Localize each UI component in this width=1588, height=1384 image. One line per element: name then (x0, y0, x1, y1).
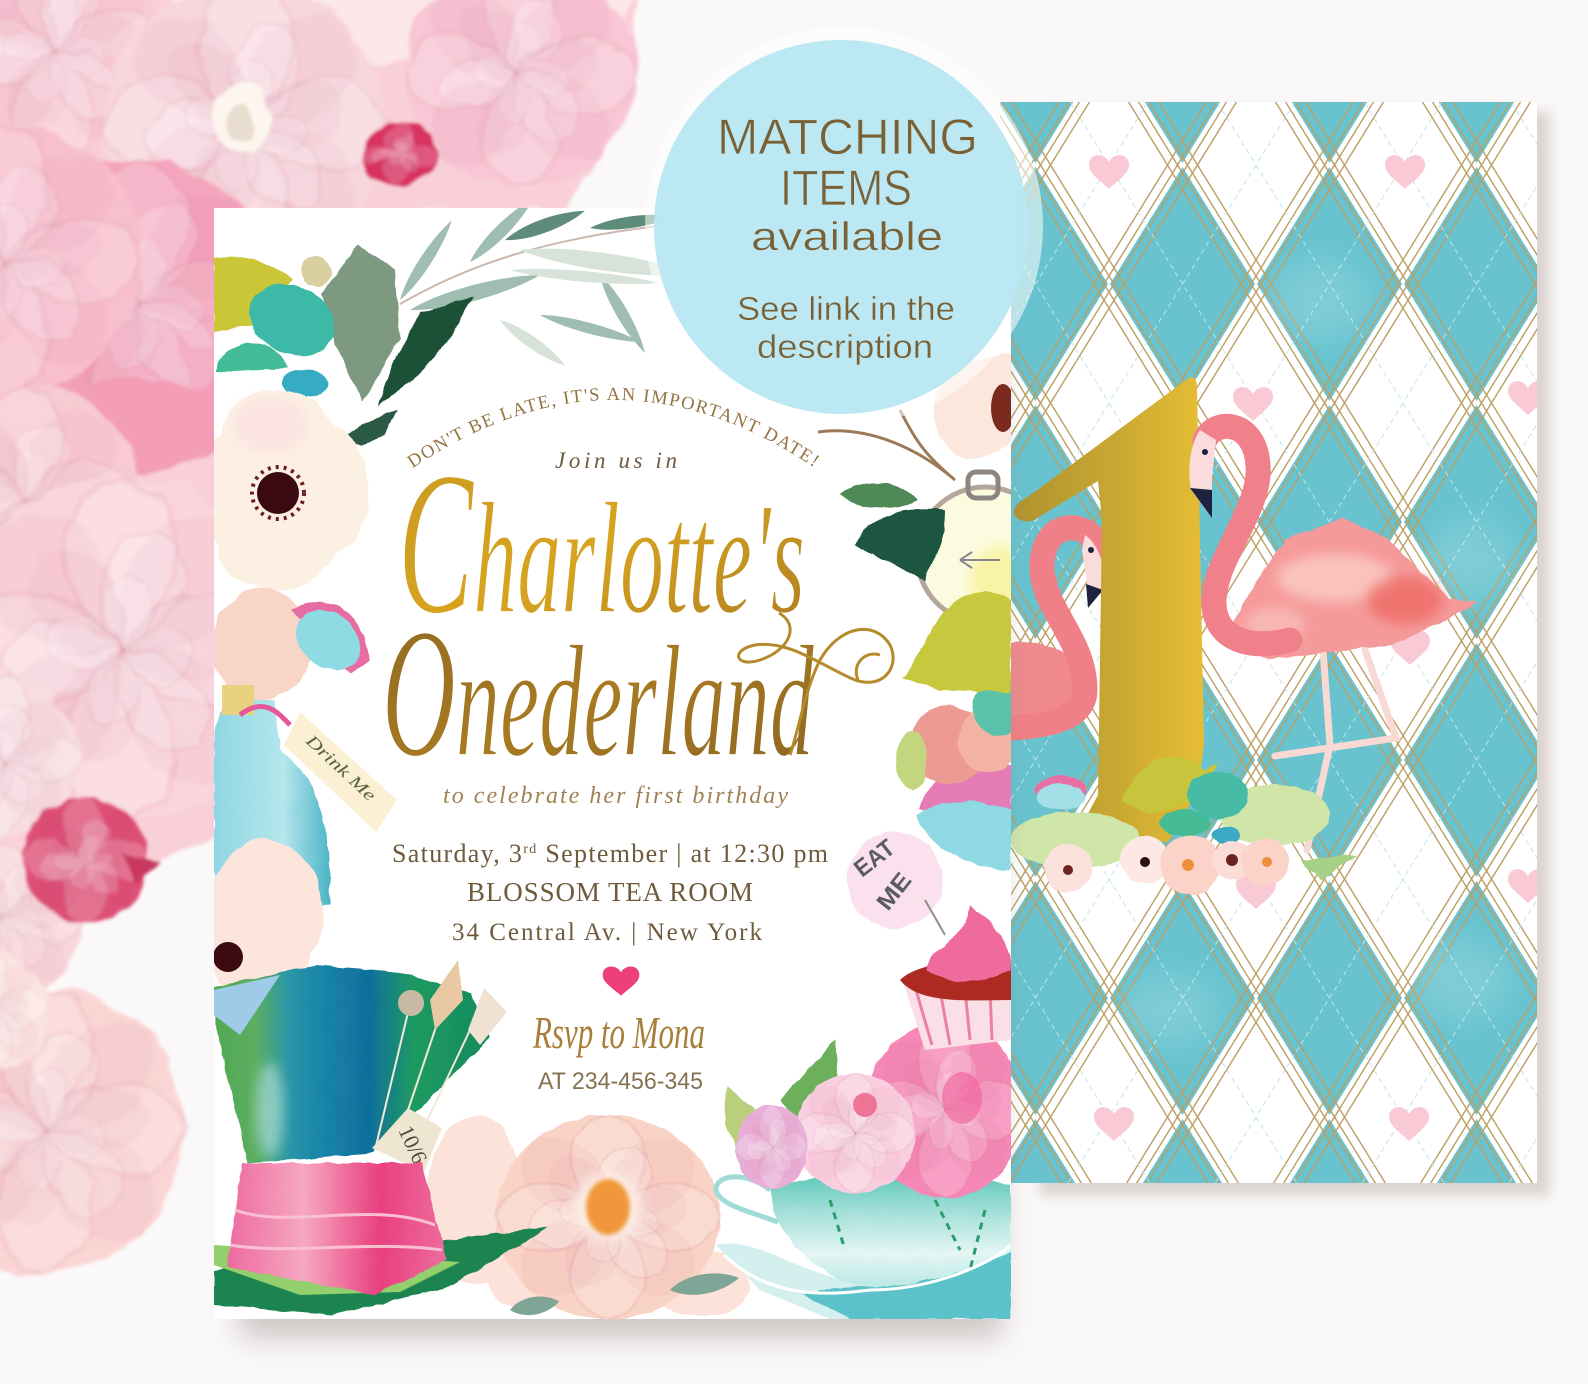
title: Charlotte's: Charlotte's (398, 430, 805, 657)
callout heading: MATCHING (717, 109, 978, 165)
callout available: available (751, 215, 943, 259)
striped patch (214, 975, 280, 1035)
title flourish (739, 613, 893, 755)
floral garland (1010, 757, 1358, 895)
callout heading line two: ITEMS (780, 160, 912, 216)
cupcake (900, 905, 1011, 1050)
date and time: rd (523, 842, 536, 857)
green mushroom right (972, 684, 1011, 736)
front card artwork (192, 194, 1053, 1319)
teal mushrooms (1188, 771, 1248, 819)
eat me sign: EAT (849, 834, 901, 883)
neck (1205, 426, 1290, 644)
callout note line two: description (757, 328, 933, 365)
price tag (372, 1108, 442, 1172)
tea roses (736, 1022, 1025, 1198)
front card: shadow (240, 260, 1002, 1338)
pink blue mushroom (292, 602, 370, 674)
white flower top right (933, 355, 1030, 460)
head and beak (1189, 430, 1216, 518)
eat me sign: ME (871, 868, 917, 916)
blossoms (1044, 844, 1092, 892)
callout note: See link in the (737, 290, 955, 327)
rsvp: Rsvp to Mona (532, 1007, 705, 1058)
peach flower lower left (214, 838, 324, 986)
front card (214, 208, 1011, 1319)
back card: watercolor wash (1120, 258, 1516, 1048)
dark leaves (322, 245, 473, 445)
gold number one (1014, 377, 1204, 842)
eat me sign (847, 832, 945, 935)
body (1225, 518, 1478, 659)
rose arrangement background (0, 0, 640, 1272)
pocket watch (918, 470, 1011, 616)
olive mushroom (1122, 757, 1218, 815)
branch and green leaves (818, 410, 955, 582)
peach peony bottom (427, 1115, 750, 1319)
hat crown (214, 965, 491, 1163)
rose leaves (724, 1040, 838, 1147)
join us text: Join us in (555, 448, 677, 473)
pink mushroom right (916, 762, 1011, 870)
eucalyptus sprigs (400, 208, 660, 366)
left flamingo (952, 528, 1104, 734)
icon: heart (603, 967, 639, 996)
venue: BLOSSOM TEA ROOM (467, 877, 753, 907)
foliage bottom (510, 1273, 739, 1316)
yellow green cap (902, 592, 1011, 692)
drink me tag (284, 712, 397, 832)
potion bottle (214, 685, 330, 912)
teacup (716, 1172, 1011, 1319)
back card: hearts (1089, 155, 1548, 1141)
hat band (227, 1163, 446, 1295)
pins (375, 960, 507, 1150)
top hat (214, 960, 549, 1315)
phone: AT 234-456-345 (538, 1068, 703, 1095)
title: Onederland: Onederland (382, 591, 815, 796)
price tag: 10/6 (393, 1122, 433, 1168)
flower right (898, 705, 1018, 790)
right flamingo (1189, 426, 1478, 850)
address: 34 Central Av. | New York (452, 919, 762, 946)
peach peony left (212, 590, 312, 700)
arched tagline: DON'T BE LATE, IT'S AN IMPORTANT DATE! (406, 388, 819, 468)
brim (214, 1227, 549, 1315)
date and time: September | at 12:30 pm (538, 839, 828, 868)
pink and blue mushroom (1035, 775, 1087, 805)
mushrooms top left (214, 256, 346, 397)
date and time: Saturday, 3 (392, 839, 522, 868)
anemone flower left (214, 390, 369, 590)
back card: argyle pattern (1000, 102, 1548, 1260)
callout: matching items (645, 27, 1043, 425)
drink me tag: Drink Me (301, 730, 380, 805)
subtitle: to celebrate her first birthday (443, 783, 788, 809)
back card: shadow (1040, 112, 1550, 1196)
legs (1275, 650, 1396, 850)
